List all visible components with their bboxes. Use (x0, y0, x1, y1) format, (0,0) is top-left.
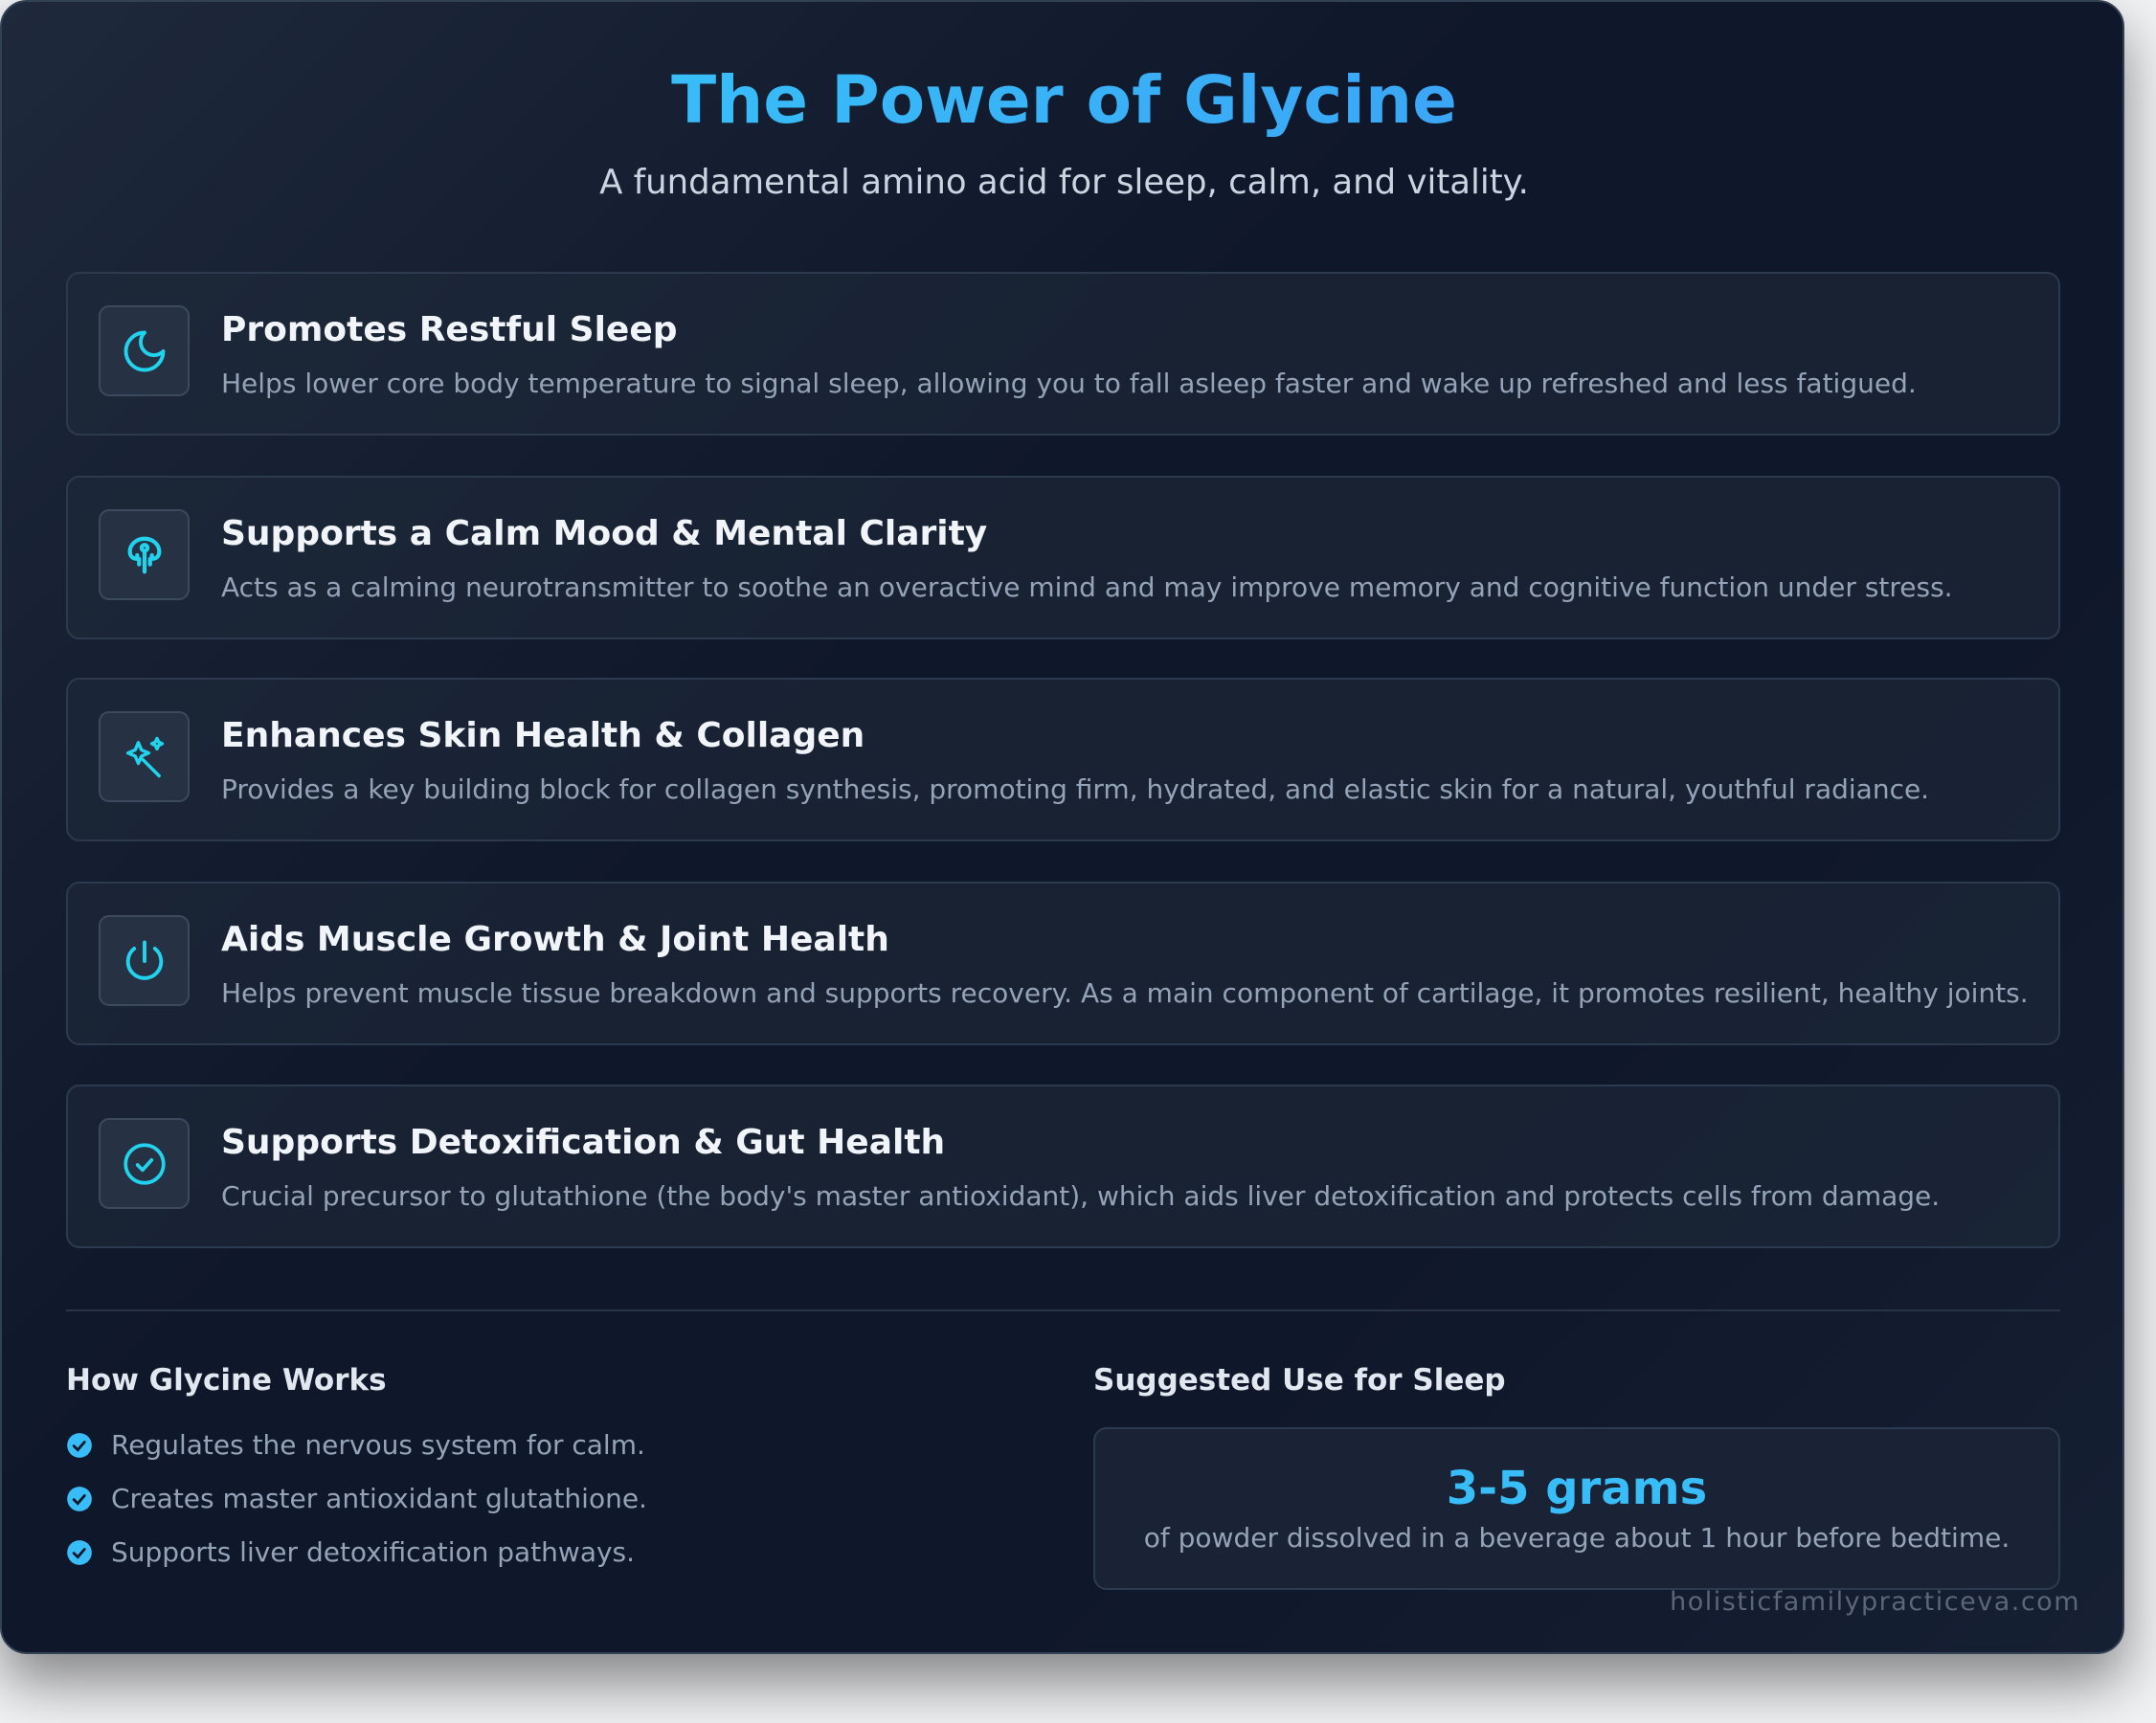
subtitle: A fundamental amino acid for sleep, calm, and vitality. (599, 163, 1529, 202)
icon: power (99, 915, 190, 1006)
heading: Supports Detoxification & Gut Health (221, 1123, 945, 1162)
dosage box (1093, 1427, 2060, 1590)
icon: brain bulb (99, 509, 190, 600)
list item 1: Regulates the nervous system for calm. (111, 1429, 645, 1461)
heading: Enhances Skin Health & Collagen (221, 716, 865, 755)
card: skin (66, 678, 2060, 841)
list item 3: Supports liver detoxification pathways. (111, 1536, 635, 1568)
heading: Aids Muscle Growth & Joint Health (221, 920, 889, 959)
heading: Promotes Restful Sleep (221, 310, 678, 349)
card: sleep (66, 272, 2060, 436)
card: detox (66, 1085, 2060, 1248)
heading: suggested use: Suggested Use for Sleep (1093, 1363, 1506, 1398)
footer url: holisticfamilypracticeva.com (1670, 1587, 2080, 1617)
description: Helps lower core body temperature to signal sleep, allowing you to fall asleep faster and wake up refreshed and less fatigued. (221, 368, 1917, 399)
icon: moon (99, 305, 190, 396)
description: Acts as a calming neurotransmitter to soothe an overactive mind and may improve memory and cognitive function under stress. (221, 571, 1953, 603)
dosage value: 3-5 grams (1447, 1462, 1707, 1515)
description: Provides a key building block for collagen synthesis, promoting firm, hydrated, and elastic skin for a natural, youthful radiance. (221, 773, 1929, 805)
title: The Power of Glycine (671, 62, 1457, 139)
description: Crucial precursor to glutathione (the body's master antioxidant), which aids liver detoxification and protects cells from damage. (221, 1180, 1940, 1212)
heading: how glycine works: How Glycine Works (66, 1363, 387, 1398)
card: mood (66, 476, 2060, 639)
icon: check circle (99, 1118, 190, 1209)
dosage note: of powder dissolved in a beverage about 1 hour before bedtime. (1144, 1522, 2010, 1554)
heading: Supports a Calm Mood & Mental Clarity (221, 514, 987, 553)
list item 2: Creates master antioxidant glutathione. (111, 1483, 647, 1514)
icon: sparkles wand (99, 711, 190, 802)
card: muscle (66, 882, 2060, 1045)
description: Helps prevent muscle tissue breakdown and supports recovery. As a main component of cartilage, it promotes resilient, healthy joints. (221, 977, 2029, 1009)
